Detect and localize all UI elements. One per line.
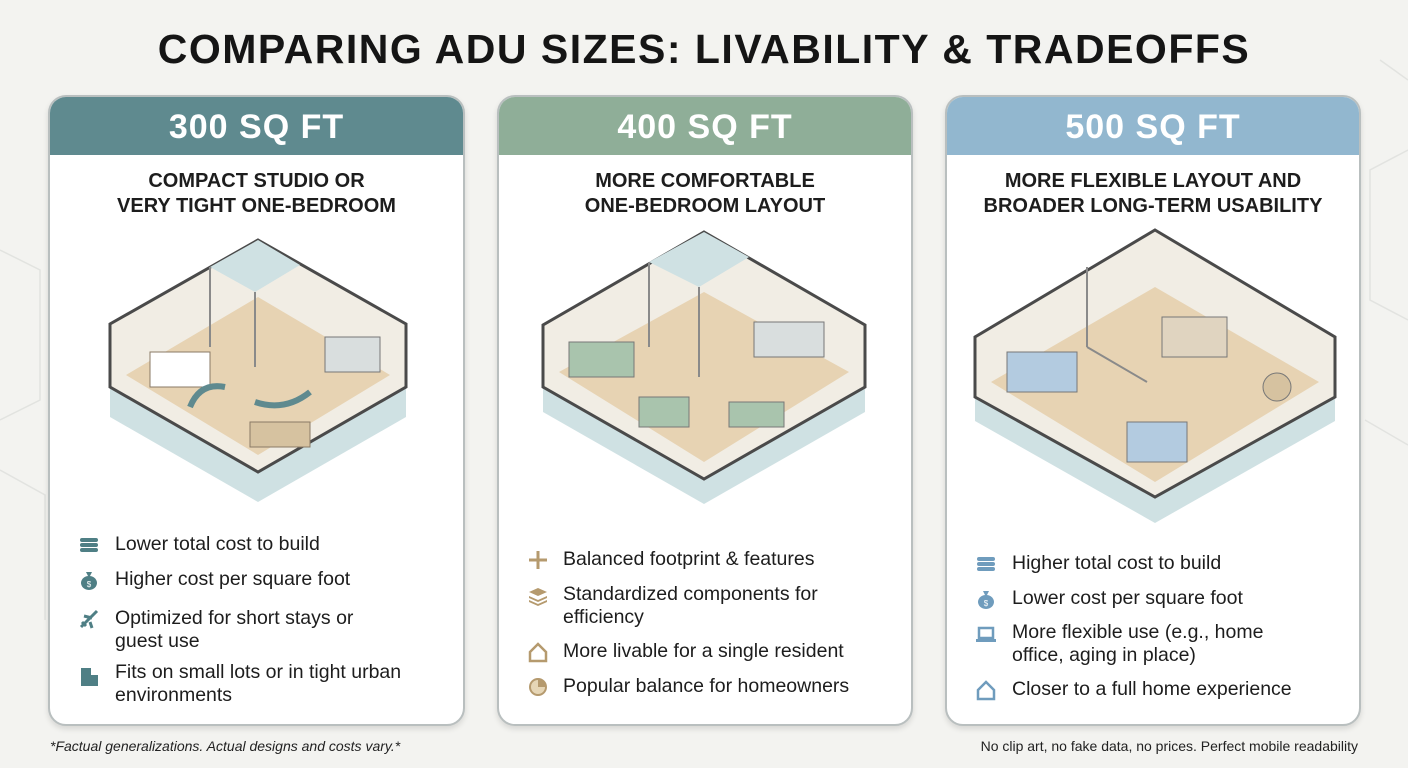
header: 300 sq ft xyxy=(50,97,463,155)
subtitle xyxy=(585,170,825,217)
panel: 400 sq ft: Popular balance for homeowners xyxy=(563,675,849,697)
subtitle xyxy=(117,170,396,217)
panel: 500 sq ft: Closer to a full home experience xyxy=(1012,678,1292,700)
footnote left: *Factual generalizations. Actual designs and costs vary.* xyxy=(50,738,400,754)
bullet list xyxy=(976,552,1292,700)
icon: pie chart xyxy=(529,678,547,696)
icon: stack of money xyxy=(977,557,995,571)
icon: money bag xyxy=(81,572,97,590)
panel: 500 sq ft xyxy=(945,95,1361,726)
icon: arrows xyxy=(529,551,547,569)
panel: 500 sq ft: Higher total cost to build xyxy=(1012,552,1221,574)
illustration: studio floorplan xyxy=(108,238,408,502)
panel: 300 sq ft: guest use xyxy=(115,630,200,652)
panel: 300 sq ft: environments xyxy=(115,684,232,706)
icon: layers xyxy=(529,588,547,606)
panel: 400 sq ft xyxy=(497,95,913,726)
icon: money bag xyxy=(978,591,994,609)
panel: 500 sq ft: More flexible use (e.g., home xyxy=(1012,621,1263,643)
panel: 500 sq ft: Lower cost per square foot xyxy=(1012,587,1243,609)
panel: 400 sq ft: efficiency xyxy=(563,606,644,628)
header: 400 sq ft xyxy=(499,97,911,155)
header: 500 sq ft xyxy=(947,97,1359,155)
footnote right: No clip art, no fake data, no prices. Perfect mobile readability xyxy=(981,738,1358,754)
panel: 300 sq ft: Optimized for short stays or xyxy=(115,607,353,629)
header: 500 sq ft: 500 SQ FT xyxy=(1065,108,1241,146)
bullet list xyxy=(528,548,849,697)
panel: 300 sq ft: Lower total cost to build xyxy=(115,533,320,555)
icon: house xyxy=(528,642,548,662)
icon: building xyxy=(81,668,98,686)
subtitle: MORE COMFORTABLE xyxy=(595,170,815,192)
header: 300 sq ft: 300 SQ FT xyxy=(169,108,344,146)
panel: 400 sq ft: Standardized components for xyxy=(563,583,818,605)
panel: 400 sq ft: Balanced footprint & features xyxy=(563,548,814,570)
header: 400 sq ft: 400 SQ FT xyxy=(617,108,793,146)
panel: 300 sq ft: Higher cost per square foot xyxy=(115,568,350,590)
icon: plane xyxy=(80,610,98,628)
subtitle: MORE FLEXIBLE LAYOUT AND xyxy=(1005,170,1301,192)
title: COMPARING ADU SIZES: LIVABILITY & TRADEOFFS xyxy=(158,26,1250,72)
subtitle: VERY TIGHT ONE-BEDROOM xyxy=(117,195,396,217)
icon: stack of money xyxy=(80,538,98,552)
icon: laptop xyxy=(976,626,996,642)
subtitle: COMPACT STUDIO OR xyxy=(148,170,365,192)
subtitle: ONE-BEDROOM LAYOUT xyxy=(585,195,825,217)
illustration: one-bedroom floorplan xyxy=(542,230,866,504)
panel: 300 sq ft xyxy=(48,95,465,726)
bullet list xyxy=(80,533,401,706)
panel: 500 sq ft: office, aging in place) xyxy=(1012,644,1196,666)
illustration: larger floorplan xyxy=(974,228,1336,523)
icon: house xyxy=(976,680,996,700)
panel: 400 sq ft: More livable for a single resident xyxy=(563,640,844,662)
subtitle xyxy=(984,170,1322,217)
panel: 300 sq ft: Fits on small lots or in tight urban xyxy=(115,661,401,683)
icon: money bag: $ xyxy=(984,599,989,608)
icon: money bag: $ xyxy=(87,580,92,589)
subtitle: BROADER LONG-TERM USABILITY xyxy=(984,195,1322,217)
